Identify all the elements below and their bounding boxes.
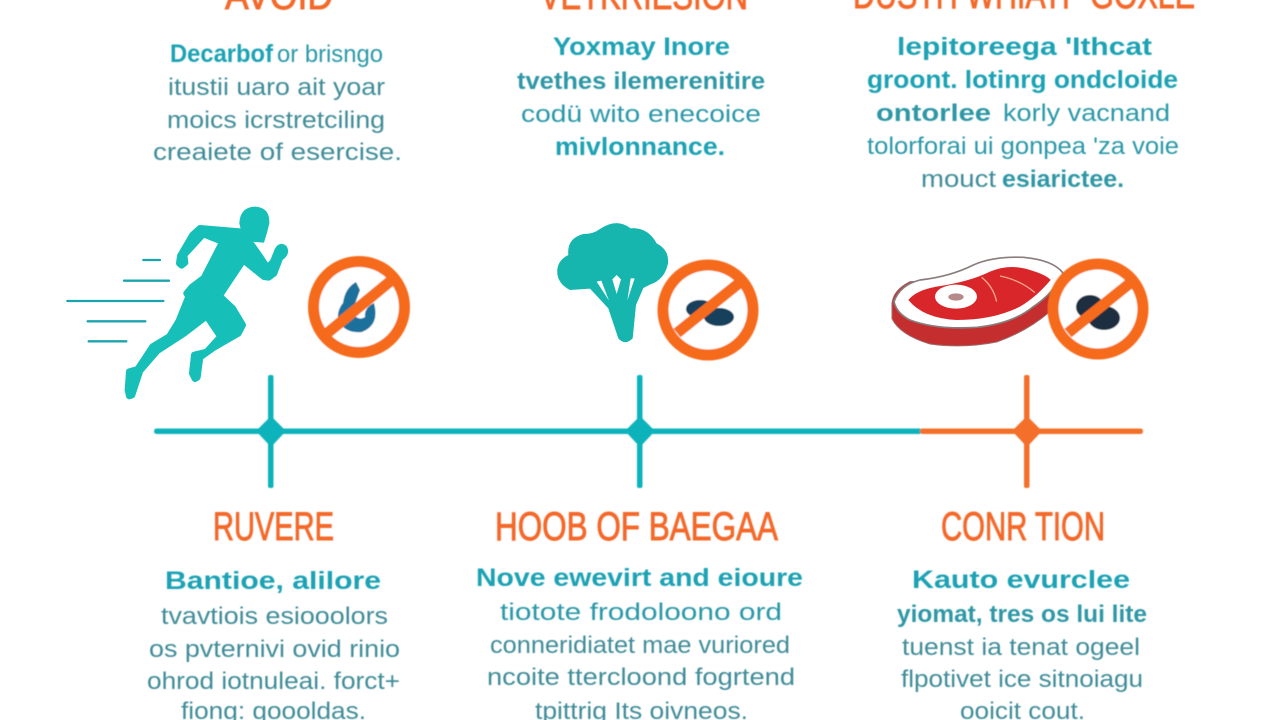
text block: lower middle: tiotote frodoloono ord xyxy=(500,599,782,626)
text block: upper left: moics icrstretciling xyxy=(167,107,385,134)
heading: lower middle: HOOB OF BAEGAA xyxy=(495,505,778,549)
text block: lower left: tvavtiois esiooolors xyxy=(161,603,388,630)
text block: upper right: mouct xyxy=(921,166,996,193)
panel: lower middle column xyxy=(476,505,803,720)
text block: lower right xyxy=(897,566,1147,720)
icon: prohibited item, left xyxy=(314,262,404,352)
text block: lower right: tuenst ia tenat ogeel xyxy=(902,634,1140,661)
icon: runner with speed lines xyxy=(67,207,285,396)
panel: upper left column xyxy=(153,0,402,166)
text block: lower right: flpotivet ice sitnoiagu xyxy=(901,666,1143,693)
text block: upper right: tolorforai ui gonpea 'za voie xyxy=(867,133,1179,160)
text block: upper middle: tvethes ilemerenitire xyxy=(517,68,765,95)
icon: steak xyxy=(892,257,1063,346)
text block: lower middle: ncoite ttercloond fogrtend xyxy=(487,664,795,691)
icon: prohibited item, middle xyxy=(663,265,753,355)
text block: lower left: ohrod iotnuleai. forct+ xyxy=(147,668,400,695)
text block: upper middle: Yoxmay Inore xyxy=(553,33,730,61)
text block: lower right: yiomat, tres os lui lite xyxy=(897,601,1147,628)
text block: lower middle: conneridiatet mae vuriored xyxy=(490,632,790,659)
text block: upper middle: mivlonnance. xyxy=(555,133,725,161)
text block: upper right: ontorlee xyxy=(876,100,991,127)
timeline xyxy=(154,375,1143,488)
panel: upper right column xyxy=(853,0,1195,193)
text block: lower right: Kauto evurclee xyxy=(912,566,1130,594)
text block: upper middle: codü wito enecoice xyxy=(521,101,761,128)
text block: upper right: lepitoreega 'Ithcat xyxy=(897,33,1153,61)
text block: lower left: os pvternivi ovid rinio xyxy=(149,636,400,663)
text block: upper left: itustii uaro ait yoar xyxy=(168,74,385,101)
text block: upper left: Decarbof xyxy=(170,40,274,68)
panel: lower left column xyxy=(147,505,400,720)
heading: lower right: CONR TION xyxy=(941,505,1105,549)
text block: upper right xyxy=(867,33,1179,193)
icon: broccoli xyxy=(557,223,668,342)
icon: prohibited item, right xyxy=(1053,264,1143,354)
text block: upper right: groont. lotinrg ondcloide xyxy=(867,66,1178,94)
text block: upper left xyxy=(153,40,402,166)
heading: lower left: RUVERE xyxy=(213,505,334,549)
text block: upper middle xyxy=(517,33,765,161)
panel: lower right column xyxy=(897,505,1147,720)
panel: upper middle column xyxy=(517,0,765,161)
text block: lower middle xyxy=(476,564,803,720)
text block: lower left: Bantioe, alilore xyxy=(165,567,381,595)
text block: upper right: korly vacnand xyxy=(1003,100,1170,127)
text block: upper left: creaiete of esercise. xyxy=(153,139,402,166)
text block: upper right: esiarictee. xyxy=(1002,166,1124,193)
text block: lower left xyxy=(147,567,400,720)
timeline marker 1 xyxy=(256,375,286,488)
text block: lower middle: Nove ewevirt and eioure xyxy=(476,564,803,592)
broccoli crown and stem xyxy=(557,223,668,342)
timeline marker 3 xyxy=(1012,375,1042,488)
text block: upper left: or brisngo xyxy=(277,41,383,68)
timeline marker 2 xyxy=(625,375,655,488)
